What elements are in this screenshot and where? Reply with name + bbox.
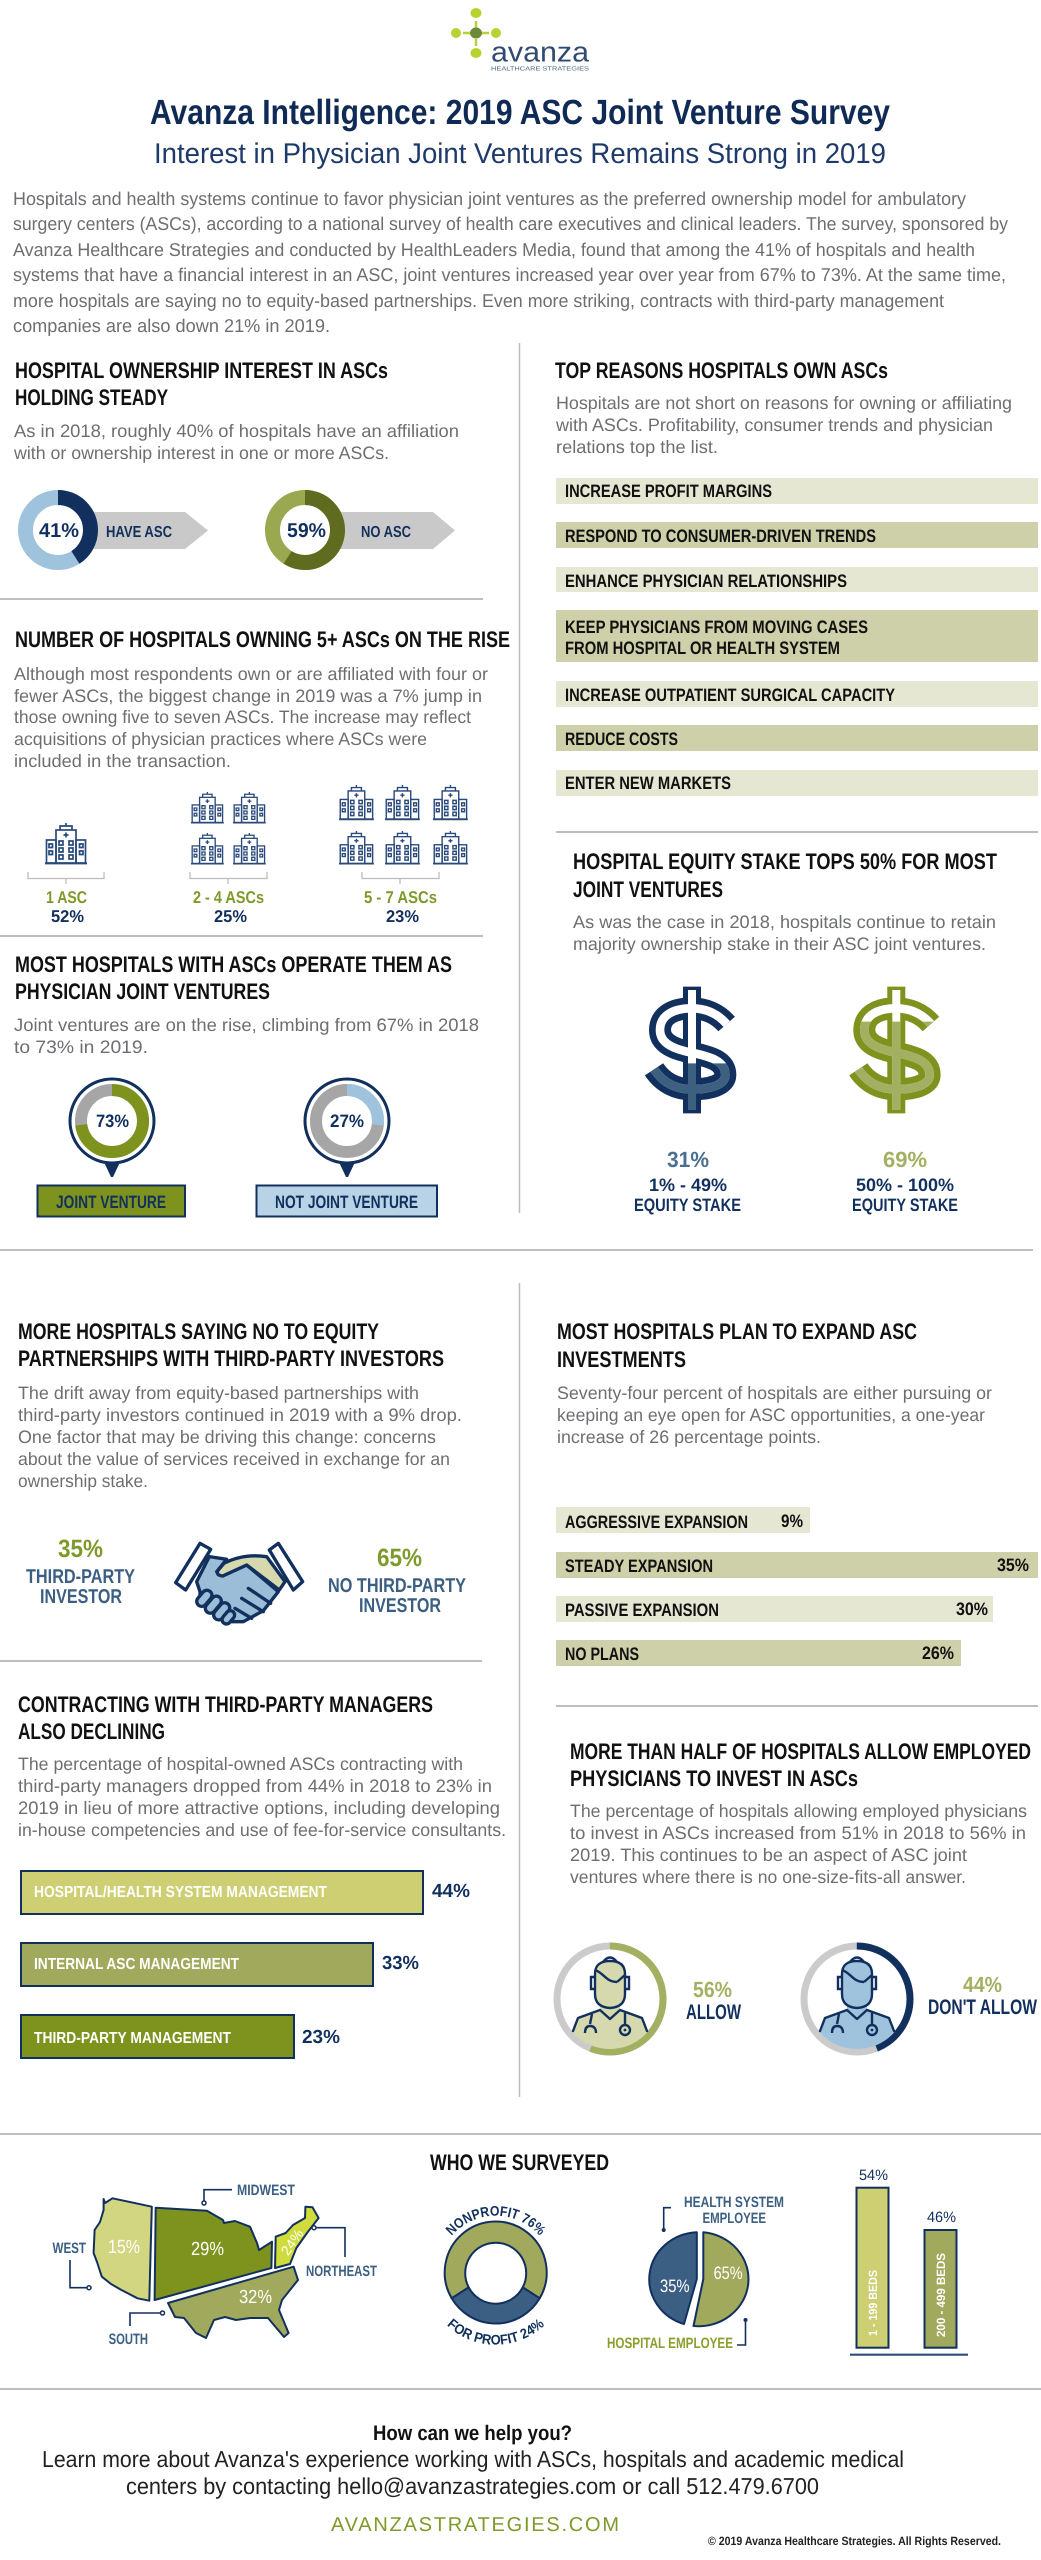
heading xyxy=(18,1319,444,1371)
icon group: 2 - 4 ASCs: 2 - 4 ASCs xyxy=(193,888,264,907)
pie chart: employee type: HEALTH SYSTEM xyxy=(684,2194,784,2211)
heading: MORE HOSPITALS SAYING NO TO EQUITY xyxy=(18,1319,379,1344)
heading xyxy=(15,358,388,410)
reason list: RESPOND TO CONSUMER-DRIVEN TRENDS xyxy=(565,526,876,546)
donut: nonprofit vs for profit xyxy=(444,2206,548,2345)
bar chart: hospital beds: 1 - 199 BEDS xyxy=(866,2270,880,2336)
pie chart: employee type: EMPLOYEE xyxy=(702,2210,766,2227)
pin: not joint venture 27%: NOT JOINT VENTURE xyxy=(275,1192,418,1212)
reason list: REDUCE COSTS xyxy=(565,729,678,749)
reason list: ENTER NEW MARKETS xyxy=(565,773,731,793)
footer xyxy=(42,2422,1001,2548)
reason list: INCREASE PROFIT MARGINS xyxy=(565,481,772,501)
body text xyxy=(570,1801,1027,1887)
intro paragraph: systems that have a financial interest in an ASC, joint ventures increased year over year from 67% to 73%. At the same time, xyxy=(13,264,1006,285)
stat: 44% don't allow xyxy=(928,1972,1037,2019)
heading: NUMBER OF HOSPITALS OWNING 5+ ASCs ON THE RISE xyxy=(15,627,510,652)
website: AVANZASTRATEGIES.COM xyxy=(331,2514,619,2536)
stat: 69% equity stake: EQUITY STAKE xyxy=(852,1195,958,1215)
intro paragraph xyxy=(13,188,1009,336)
bar chart: hospital beds: 200 - 499 BEDS xyxy=(934,2253,948,2337)
stat: 65% no third-party investor: INVESTOR xyxy=(359,1595,441,1617)
stat: 69% equity stake: 69% xyxy=(883,1147,927,1172)
panel: employed physicians investing xyxy=(557,1739,1037,2059)
heading: MOST HOSPITALS PLAN TO EXPAND ASC xyxy=(557,1319,917,1344)
reason list: FROM HOSPITAL OR HEALTH SYSTEM xyxy=(565,638,840,658)
body text: about the value of services received in exchange for an xyxy=(18,1449,450,1469)
heading: PHYSICIANS TO INVEST IN ASCs xyxy=(570,1766,858,1791)
heading: WHO WE SURVEYED xyxy=(430,2150,609,2175)
bar chart: management type: 23% xyxy=(302,2027,340,2048)
call to action heading: How can we help you? xyxy=(373,2422,572,2445)
bar chart: expansion plans: STEADY EXPANSION xyxy=(565,1556,713,1576)
heading xyxy=(18,1692,433,1744)
contact text xyxy=(42,2446,904,2499)
stat: 65% no third-party investor: NO THIRD-PARTY xyxy=(328,1575,467,1597)
icon: doctor 56% allow xyxy=(557,1946,663,2059)
pin: joint venture 73%: 73% xyxy=(96,1111,129,1131)
body text: Seventy-four percent of hospitals are either pursuing or xyxy=(557,1383,992,1403)
bar chart: expansion plans: AGGRESSIVE EXPANSION xyxy=(565,1512,748,1532)
panel: physician joint ventures xyxy=(14,952,479,1216)
panel: who we surveyed xyxy=(52,2150,968,2356)
body text xyxy=(13,421,459,463)
panel: hospital equity stake xyxy=(573,849,997,1215)
body text xyxy=(573,912,996,954)
icon: handshake xyxy=(176,1543,303,1626)
stat: 65% no third-party investor: 65% xyxy=(377,1544,422,1572)
stat: 56% allow: ALLOW xyxy=(686,2001,741,2024)
donut: have ASC 41% xyxy=(26,498,208,562)
stat: 31% equity stake: 1% - 49% xyxy=(649,1175,727,1195)
stat: 56% allow xyxy=(686,1977,741,2024)
body text: included in the transaction. xyxy=(14,751,231,771)
bar chart: management type: 33% xyxy=(382,1953,419,1974)
logo: avanza xyxy=(451,8,589,72)
body text: third-party investors continued in 2019 with a 9% drop. xyxy=(18,1405,462,1425)
bar chart: hospital beds: 54% xyxy=(859,2167,888,2184)
heading: TOP REASONS HOSPITALS OWN ASCs xyxy=(555,358,888,383)
stat: 44% don't allow: 44% xyxy=(963,1972,1002,1997)
body text: The drift away from equity-based partnerships with xyxy=(18,1383,419,1403)
body text: 2019. This continues to be an aspect of ASC joint xyxy=(570,1845,967,1865)
icon group: 2 - 4 ASCs xyxy=(190,792,267,926)
panel: top reasons hospitals own ASCs xyxy=(555,358,1038,796)
icon group: 2 - 4 ASCs: 25% xyxy=(214,907,247,926)
bar chart: management type: 44% xyxy=(432,1881,470,1902)
pin: not joint venture 27%: 27% xyxy=(330,1111,364,1131)
reason list: INCREASE OUTPATIENT SURGICAL CAPACITY xyxy=(565,685,895,705)
icon: doctor 44% don't allow xyxy=(804,1946,910,2059)
intro paragraph: companies are also down 21% in 2019. xyxy=(13,315,330,336)
heading xyxy=(557,1319,917,1372)
body text: third-party managers dropped from 44% in 2018 to 23% in xyxy=(18,1776,492,1796)
reason list: ENHANCE PHYSICIAN RELATIONSHIPS xyxy=(565,571,847,591)
bar chart: management type xyxy=(21,1871,470,2058)
icon group: 1 ASC: 1 ASC xyxy=(46,888,87,907)
intro paragraph: more hospitals are saying no to equity-based partnerships. Even more striking, contracts with third-party management xyxy=(13,290,944,311)
heading: HOLDING STEADY xyxy=(15,385,168,410)
body text: majority ownership stake in their ASC joint ventures. xyxy=(573,934,986,954)
body text: The percentage of hospitals allowing employed physicians xyxy=(570,1801,1027,1821)
bar chart: expansion plans: 26% xyxy=(922,1643,954,1663)
heading: INVESTMENTS xyxy=(557,1347,686,1372)
copyright: © 2019 Avanza Healthcare Strategies. All Rights Reserved. xyxy=(708,2534,1001,2548)
stat: 65% no third-party investor xyxy=(328,1544,467,1617)
body text: Hospitals are not short on reasons for owning or affiliating xyxy=(556,393,1012,413)
pie chart: employee type: 65% xyxy=(714,2263,743,2283)
icon: dollar sign 31% xyxy=(654,987,727,1113)
stat: 31% equity stake xyxy=(634,1147,741,1215)
map: US regions: 32% xyxy=(239,2287,272,2308)
pin: not joint venture 27% xyxy=(256,1079,437,1216)
bar chart: expansion plans: 35% xyxy=(997,1555,1029,1575)
bar chart: management type: HOSPITAL/HEALTH SYSTEM MANAGEMENT xyxy=(34,1884,327,1901)
body text: to invest in ASCs increased from 51% in 2018 to 56% in xyxy=(570,1823,1026,1843)
pie chart: employee type xyxy=(607,2194,784,2352)
map: US regions: 24% xyxy=(277,2226,307,2258)
intro paragraph: Avanza Healthcare Strategies and conducted by HealthLeaders Media, found that among the 41% of hospitals and health xyxy=(13,239,975,260)
panel: expand ASC investments xyxy=(556,1319,1038,1666)
body text: those owning five to seven ASCs. The increase may reflect xyxy=(14,707,471,727)
pin: joint venture 73% xyxy=(38,1079,185,1216)
body text: in-house competencies and use of fee-for-service consultants. xyxy=(18,1820,506,1840)
stat: 31% equity stake: 31% xyxy=(667,1147,709,1172)
heading: MOST HOSPITALS WITH ASCs OPERATE THEM AS xyxy=(15,952,452,977)
pin: joint venture 73%: JOINT VENTURE xyxy=(56,1192,166,1212)
body text: with or ownership interest in one or more ASCs. xyxy=(13,443,389,463)
donut: no ASC 59%: 59% xyxy=(287,520,326,542)
map: US regions: WEST xyxy=(52,2240,86,2257)
body text: 2019 in lieu of more attractive options, including developing xyxy=(18,1798,500,1818)
heading xyxy=(570,1739,1031,1791)
panel: no to equity partnerships xyxy=(18,1319,467,1626)
body text xyxy=(18,1754,506,1840)
logo: avanza: HEALTHCARE STRATEGIES xyxy=(491,66,589,72)
bar chart: hospital beds xyxy=(850,2167,968,2355)
panel: contracting with third-party managers xyxy=(18,1692,506,2058)
donut: have ASC 41%: 41% xyxy=(39,520,79,542)
map: US regions: MIDWEST xyxy=(237,2182,295,2199)
stat: 35% third-party investor xyxy=(26,1535,136,1608)
body text xyxy=(18,1383,462,1491)
bar chart: expansion plans: NO PLANS xyxy=(565,1644,639,1664)
map: US regions: SOUTH xyxy=(109,2331,148,2348)
map: US regions: 15% xyxy=(108,2237,140,2258)
stat: 35% third-party investor: INVESTOR xyxy=(40,1586,122,1608)
intro paragraph: Hospitals and health systems continue to favor physician joint ventures as the preferred ownership model for ambulatory xyxy=(13,188,967,209)
heading: HOSPITAL OWNERSHIP INTEREST IN ASCs xyxy=(15,358,388,383)
icon group: 1 ASC xyxy=(28,823,104,926)
icon group: 5 - 7 ASCs: 23% xyxy=(386,907,419,926)
map: US regions xyxy=(52,2182,377,2348)
donut: have ASC 41%: HAVE ASC xyxy=(106,524,172,541)
donut: no ASC 59%: NO ASC xyxy=(361,524,411,541)
body text: Joint ventures are on the rise, climbing from 67% in 2018 xyxy=(14,1015,479,1035)
donut: no ASC 59% xyxy=(272,498,455,562)
icon group: 1 ASC: 52% xyxy=(51,907,84,926)
heading xyxy=(573,849,997,902)
body text: As in 2018, roughly 40% of hospitals have an affiliation xyxy=(14,421,459,441)
icon: dollar sign 69% xyxy=(858,987,931,1113)
map: US regions: NORTHEAST xyxy=(306,2263,377,2280)
icon group: 5 - 7 ASCs xyxy=(339,785,468,926)
bar chart: expansion plans: 9% xyxy=(781,1511,803,1531)
heading: CONTRACTING WITH THIRD-PARTY MANAGERS xyxy=(18,1692,433,1717)
body text: One factor that may be driving this change: concerns xyxy=(18,1427,436,1447)
title: Avanza Intelligence: 2019 ASC Joint Venture Survey xyxy=(150,93,890,132)
stat: 69% equity stake xyxy=(852,1147,958,1215)
reason list xyxy=(556,478,1038,796)
body text: relations top the list. xyxy=(556,437,718,457)
heading: PARTNERSHIPS WITH THIRD-PARTY INVESTORS xyxy=(18,1346,444,1371)
body text: ownership stake. xyxy=(18,1471,148,1491)
reason list: KEEP PHYSICIANS FROM MOVING CASES xyxy=(565,617,868,637)
body text xyxy=(14,1015,479,1057)
stat: 31% equity stake: EQUITY STAKE xyxy=(634,1195,741,1215)
panel: hospital ownership interest xyxy=(13,358,459,562)
heading xyxy=(15,952,452,1004)
donut: nonprofit vs for profit: FOR PROFIT 24% xyxy=(447,2318,544,2345)
body text: increase of 26 percentage points. xyxy=(557,1427,821,1447)
contact text: Learn more about Avanza's experience working with ASCs, hospitals and academic medical xyxy=(42,2446,904,2472)
pie chart: employee type: 35% xyxy=(660,2276,690,2296)
subtitle: Interest in Physician Joint Ventures Remains Strong in 2019 xyxy=(154,138,886,170)
intro paragraph: surgery centers (ASCs), according to a national survey of health care executives and clinical leaders. The survey, sponsored by xyxy=(13,213,1009,234)
body text: keeping an eye open for ASC opportunities, a one-year xyxy=(557,1405,985,1425)
body text: fewer ASCs, the biggest change in 2019 was a 7% jump in xyxy=(14,686,482,706)
donut: nonprofit vs for profit: NONPROFIT 76% xyxy=(445,2206,546,2236)
body text: As was the case in 2018, hospitals continue to retain xyxy=(573,912,996,932)
bar chart: management type: INTERNAL ASC MANAGEMENT xyxy=(34,1956,239,1973)
body text: Although most respondents own or are affiliated with four or xyxy=(14,664,488,684)
body text: acquisitions of physician practices where ASCs were xyxy=(14,729,427,749)
body text: ventures where there is no one-size-fits-all answer. xyxy=(570,1867,966,1887)
logo: avanza: avanza xyxy=(491,36,589,68)
body text xyxy=(14,664,488,771)
body text xyxy=(557,1383,992,1447)
body text: to 73% in 2019. xyxy=(14,1037,148,1057)
pie chart: employee type: HOSPITAL EMPLOYEE xyxy=(607,2335,733,2352)
bar chart: hospital beds: 46% xyxy=(927,2209,956,2226)
heading: PHYSICIAN JOINT VENTURES xyxy=(15,979,270,1004)
contact text: centers by contacting hello@avanzastrategies.com or call 512.479.6700 xyxy=(126,2473,819,2499)
stat: 69% equity stake: 50% - 100% xyxy=(856,1175,954,1195)
stat: 35% third-party investor: 35% xyxy=(58,1535,103,1563)
body text: with ASCs. Profitability, consumer trends and physician xyxy=(555,415,993,435)
map: US regions: 29% xyxy=(191,2239,224,2260)
body text: The percentage of hospital-owned ASCs contracting with xyxy=(18,1754,463,1774)
body text xyxy=(555,393,1012,457)
bar chart: expansion plans: 30% xyxy=(956,1599,988,1619)
bar chart: management type: THIRD-PARTY MANAGEMENT xyxy=(34,2030,231,2047)
icon group: 5 - 7 ASCs: 5 - 7 ASCs xyxy=(364,888,437,907)
bar chart: expansion plans xyxy=(556,1507,1038,1666)
stat: 56% allow: 56% xyxy=(693,1977,732,2002)
panel: number of hospitals owning 5+ ASCs xyxy=(14,627,510,926)
heading: JOINT VENTURES xyxy=(573,877,723,902)
stat: 35% third-party investor: THIRD-PARTY xyxy=(26,1566,136,1588)
heading: ALSO DECLINING xyxy=(18,1719,165,1744)
bar chart: expansion plans: PASSIVE EXPANSION xyxy=(565,1600,719,1620)
